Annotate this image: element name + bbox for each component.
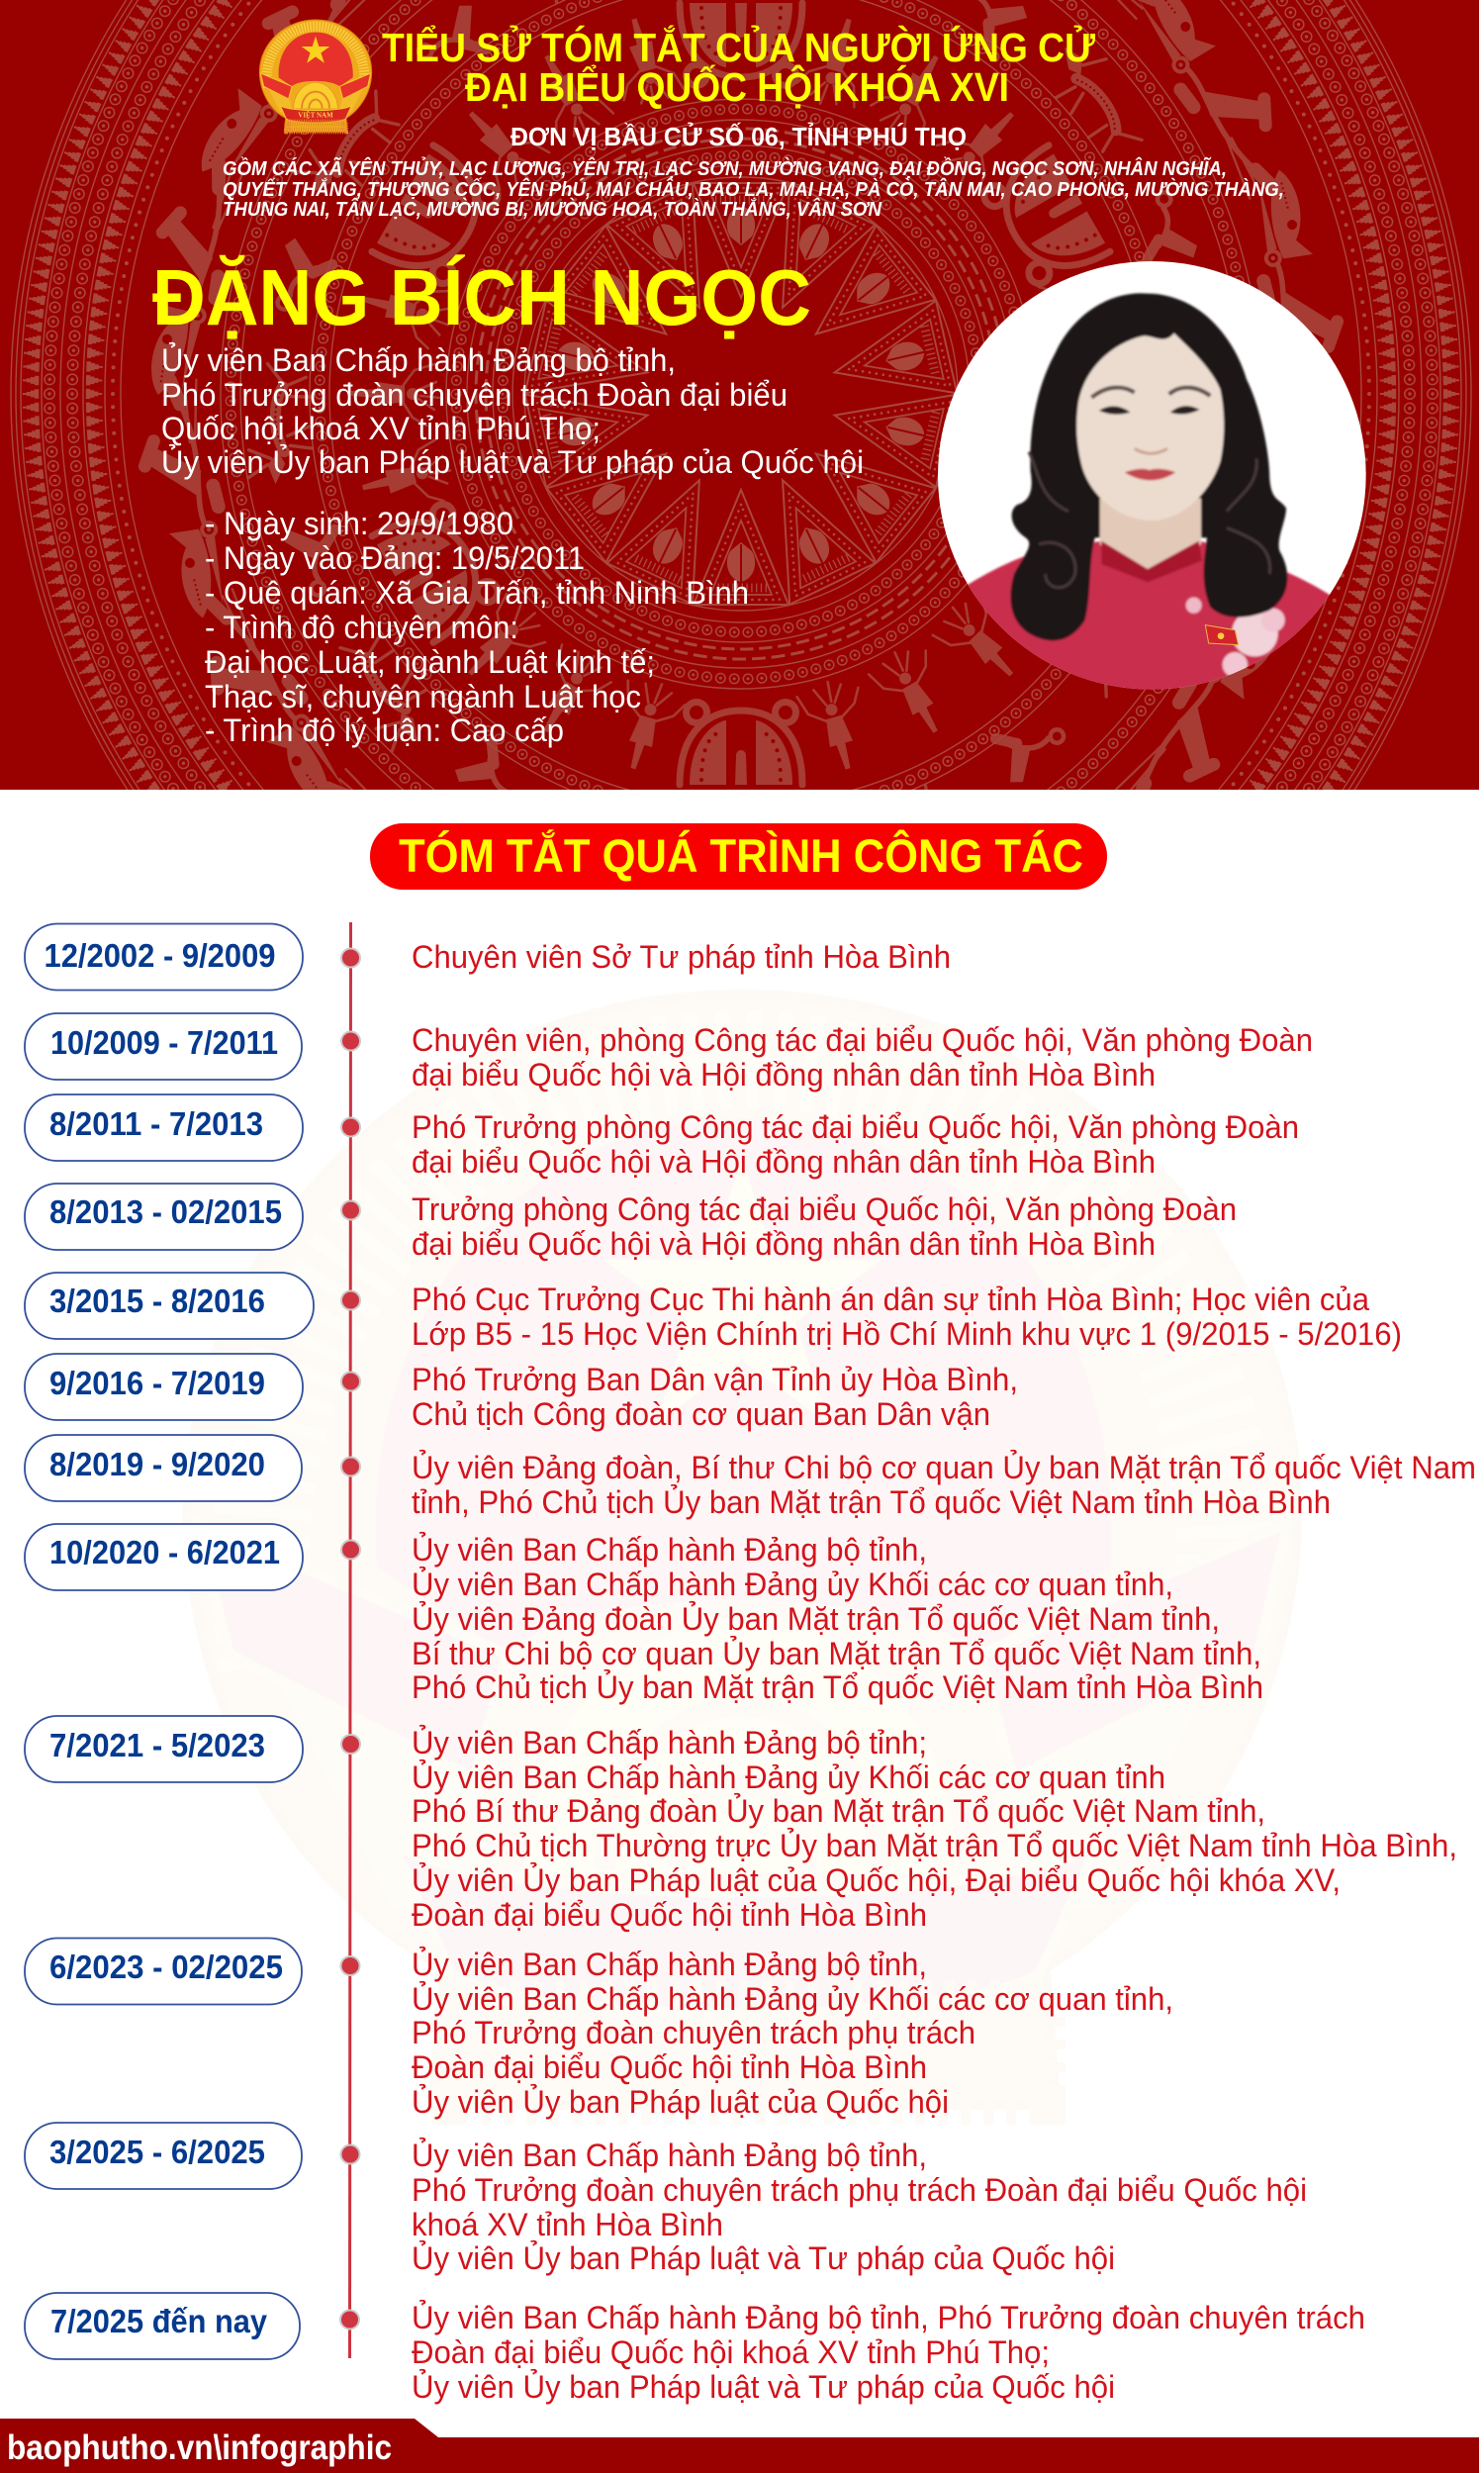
- entry: 7/2021 - 5/2023: 7/2021 - 5/2023: [49, 1727, 265, 1763]
- text block: list of communes: QUYẾT THẮNG, THƯỢNG CỐC, YÊN PhÚ, MAI CHÂU, BAO LA, MAI HẠ, PÀ CÒ, TÂN MAI, CAO PHONG, MƯỜNG THÀNG,: [223, 177, 1284, 201]
- text block: personal details: - Trình độ lý luận: Cao cấp: [205, 713, 564, 748]
- entry: 8/2011 - 7/2013: [25, 1094, 1299, 1180]
- entry: 6/2023 - 02/2025: Phó Trưởng đoàn chuyên trách phụ trách: [412, 2015, 975, 2050]
- entry: 7/2025 đến nay: [25, 2293, 1365, 2405]
- entry: 8/2013 - 02/2015: [25, 1184, 1237, 1262]
- entry: 10/2009 - 7/2011: Chuyên viên, phòng Công tác đại biểu Quốc hội, Văn phòng Đoàn: [412, 1022, 1313, 1058]
- entry: 3/2025 - 6/2025: Ủy viên Ủy ban Pháp luật và Tư pháp của Quốc hội: [412, 2240, 1115, 2276]
- text block: list of communes: [223, 156, 1284, 221]
- entry: 3/2025 - 6/2025: [25, 2123, 1307, 2276]
- entry: 6/2023 - 02/2025: Đoàn đại biểu Quốc hội tỉnh Hòa Bình: [412, 2049, 927, 2085]
- entry: 7/2021 - 5/2023: [25, 1716, 1457, 1933]
- text block: positions: Quốc hội khoá XV tỉnh Phú Thọ;: [161, 411, 601, 446]
- background watermark: national emblem: [187, 995, 1297, 2105]
- title: ĐẠI BIỂU QUỐC HỘI KHÓA XVI: [465, 63, 1009, 110]
- entry: 10/2020 - 6/2021: Ủy viên Ban Chấp hành Đảng ủy Khối các cơ quan tỉnh,: [412, 1567, 1173, 1602]
- panel: red header background with bronze drum pattern: [0, 0, 1479, 790]
- title: TIỂU SỬ TÓM TẮT CỦA NGƯỜI ỨNG CỬ: [382, 24, 1096, 70]
- entry: 6/2023 - 02/2025: [25, 1938, 1173, 2120]
- entry: 6/2023 - 02/2025: Ủy viên Ban Chấp hành Đảng bộ tỉnh,: [412, 1947, 927, 1982]
- entry: 7/2025 đến nay: Đoàn đại biểu Quốc hội khoá XV tỉnh Phú Thọ;: [412, 2334, 1050, 2370]
- text block: personal details: - Ngày sinh: 29/9/1980: [205, 506, 513, 541]
- entry: 7/2025 đến nay: Ủy viên Ban Chấp hành Đảng bộ tỉnh, Phó Trưởng đoàn chuyên trách: [412, 2300, 1365, 2335]
- entry: 7/2025 đến nay: Ủy viên Ủy ban Pháp luật và Tư pháp của Quốc hội: [412, 2369, 1115, 2405]
- entry: 8/2011 - 7/2013: đại biểu Quốc hội và Hội đồng nhân dân tỉnh Hòa Bình: [412, 1144, 1156, 1180]
- entry: 8/2013 - 02/2015: Trưởng phòng Công tác đại biểu Quốc hội, Văn phòng Đoàn: [412, 1191, 1237, 1227]
- entry: 8/2013 - 02/2015: 8/2013 - 02/2015: [49, 1193, 282, 1230]
- text block: personal details: [205, 506, 749, 748]
- entry: 12/2002 - 9/2009: [25, 924, 951, 990]
- entry: 7/2025 đến nay: 7/2025 đến nay: [50, 2303, 268, 2339]
- heading pill: work history: TÓM TẮT QUÁ TRÌNH CÔNG TÁC: [399, 829, 1083, 882]
- text block: personal details: Thạc sĩ, chuyên ngành Luật học: [205, 679, 641, 714]
- subtitle: constituency: ĐƠN VỊ BẦU CỬ SỐ 06, TỈNH PHÚ THỌ: [510, 121, 967, 151]
- text block: positions: [161, 342, 864, 480]
- entry: 7/2021 - 5/2023: Phó Chủ tịch Thường trực Ủy ban Mặt trận Tổ quốc Việt Nam tỉnh Hòa Bình,: [412, 1828, 1457, 1863]
- entry: 7/2021 - 5/2023: Ủy viên Ủy ban Pháp luật của Quốc hội, Đại biểu Quốc hội khóa XV,: [412, 1862, 1341, 1898]
- text block: positions: Ủy viên Ủy ban Pháp luật và Tư pháp của Quốc hội: [161, 444, 864, 480]
- entry: 8/2019 - 9/2020: [25, 1435, 1476, 1520]
- entry: 8/2019 - 9/2020: Ủy viên Đảng đoàn, Bí thư Chi bộ cơ quan Ủy ban Mặt trận Tổ quốc Việt Nam: [412, 1450, 1476, 1485]
- entry: 3/2015 - 8/2016: [25, 1273, 1402, 1352]
- text block: positions: Ủy viên Ban Chấp hành Đảng bộ tỉnh,: [161, 342, 676, 378]
- entry: 10/2020 - 6/2021: 10/2020 - 6/2021: [49, 1534, 280, 1570]
- entry: 3/2025 - 6/2025: khoá XV tỉnh Hòa Bình: [412, 2207, 723, 2242]
- entry: 8/2011 - 7/2013: Phó Trưởng phòng Công tác đại biểu Quốc hội, Văn phòng Đoàn: [412, 1109, 1299, 1145]
- footer bar: baophutho.vn\infographic: [7, 2428, 392, 2467]
- entry: 10/2020 - 6/2021: Phó Chủ tịch Ủy ban Mặt trận Tổ quốc Việt Nam tỉnh Hòa Bình: [412, 1669, 1263, 1705]
- entry: 6/2023 - 02/2025: Ủy viên Ban Chấp hành Đảng ủy Khối các cơ quan tỉnh,: [412, 1981, 1173, 2017]
- entry: 6/2023 - 02/2025: 6/2023 - 02/2025: [49, 1949, 283, 1985]
- entry: 9/2016 - 7/2019: 9/2016 - 7/2019: [49, 1365, 265, 1401]
- text block: personal details: - Ngày vào Đảng: 19/5/2011: [205, 540, 585, 576]
- entry: 7/2021 - 5/2023: Ủy viên Ban Chấp hành Đảng ủy Khối các cơ quan tỉnh: [412, 1760, 1165, 1795]
- footer bar: [0, 2419, 1479, 2473]
- entry: 3/2015 - 8/2016: 3/2015 - 8/2016: [49, 1283, 265, 1319]
- entry: 3/2025 - 6/2025: Phó Trưởng đoàn chuyên trách phụ trách Đoàn đại biểu Quốc hội: [412, 2172, 1307, 2208]
- timeline axis: [350, 922, 351, 2358]
- entry: 8/2013 - 02/2015: đại biểu Quốc hội và Hội đồng nhân dân tỉnh Hòa Bình: [412, 1226, 1156, 1262]
- entry: 3/2015 - 8/2016: Lớp B5 - 15 Học Viện Chính trị Hồ Chí Minh khu vực 1 (9/2015 - 5/2016): [412, 1316, 1402, 1352]
- entry: 8/2019 - 9/2020: 8/2019 - 9/2020: [49, 1446, 265, 1482]
- entry: 3/2025 - 6/2025: Ủy viên Ban Chấp hành Đảng bộ tỉnh,: [412, 2138, 927, 2173]
- icon: national emblem: VIỆT NAM: [298, 112, 333, 120]
- entry: 10/2009 - 7/2011: 10/2009 - 7/2011: [50, 1024, 278, 1061]
- entry: 12/2002 - 9/2009: Chuyên viên Sở Tư pháp tỉnh Hòa Bình: [412, 939, 951, 975]
- portrait photo in circle: [938, 261, 1366, 710]
- entry: 7/2021 - 5/2023: Đoàn đại biểu Quốc hội tỉnh Hòa Bình: [412, 1897, 927, 1933]
- heading: candidate name: ĐẶNG BÍCH NGỌC: [152, 253, 811, 341]
- text block: personal details: - Quê quán: Xã Gia Trấn, tỉnh Ninh Bình: [205, 575, 749, 611]
- entry: 3/2025 - 6/2025: 3/2025 - 6/2025: [49, 2134, 265, 2170]
- entry: 8/2019 - 9/2020: tỉnh, Phó Chủ tịch Ủy ban Mặt trận Tổ quốc Việt Nam tỉnh Hòa Bình: [412, 1484, 1331, 1520]
- entry: 7/2021 - 5/2023: Ủy viên Ban Chấp hành Đảng bộ tỉnh;: [412, 1725, 927, 1760]
- entry: 10/2020 - 6/2021: Ủy viên Ban Chấp hành Đảng bộ tỉnh,: [412, 1532, 927, 1568]
- entry: 7/2021 - 5/2023: Phó Bí thư Đảng đoàn Ủy ban Mặt trận Tổ quốc Việt Nam tỉnh,: [412, 1793, 1265, 1829]
- icon: national emblem: [259, 20, 372, 132]
- text block: list of communes: THUNG NAI, TÂN LẠC, MƯỜNG BI, MƯỜNG HOA, TOÀN THẮNG, VÂN SƠN: [223, 197, 882, 221]
- text block: positions: Phó Trưởng đoàn chuyên trách Đoàn đại biểu: [161, 377, 788, 413]
- entry: 9/2016 - 7/2019: Phó Trưởng Ban Dân vận Tỉnh ủy Hòa Bình,: [412, 1362, 1018, 1397]
- entry: 9/2016 - 7/2019: [25, 1354, 1018, 1432]
- entry: 9/2016 - 7/2019: Chủ tịch Công đoàn cơ quan Ban Dân vận: [412, 1396, 990, 1432]
- text block: list of communes: GỒM CÁC XÃ YÊN THỦY, LẠC LƯƠNG, YÊN TRỊ, LẠC SƠN, MƯỜNG VANG, ĐẠI ĐỒNG, NGỌC SƠN, NHÂN NGHĨA,: [223, 156, 1227, 180]
- entry: 6/2023 - 02/2025: Ủy viên Ủy ban Pháp luật của Quốc hội: [412, 2084, 949, 2120]
- text block: personal details: - Trình độ chuyên môn:: [205, 610, 518, 645]
- entry: 8/2011 - 7/2013: 8/2011 - 7/2013: [49, 1105, 263, 1142]
- title: [382, 24, 1096, 110]
- entry: 10/2009 - 7/2011: [25, 1013, 1313, 1093]
- entry: 10/2020 - 6/2021: Ủy viên Đảng đoàn Ủy ban Mặt trận Tổ quốc Việt Nam tỉnh,: [412, 1601, 1220, 1637]
- entry: 3/2015 - 8/2016: Phó Cục Trưởng Cục Thi hành án dân sự tỉnh Hòa Bình; Học viên của: [412, 1282, 1369, 1317]
- text block: personal details: Đại học Luật, ngành Luật kinh tế;: [205, 644, 655, 680]
- entry: 10/2009 - 7/2011: đại biểu Quốc hội và Hội đồng nhân dân tỉnh Hòa Bình: [412, 1057, 1156, 1093]
- entry: 12/2002 - 9/2009: 12/2002 - 9/2009: [44, 937, 275, 974]
- entry: 10/2020 - 6/2021: [25, 1524, 1263, 1705]
- entry: 10/2020 - 6/2021: Bí thư Chi bộ cơ quan Ủy ban Mặt trận Tổ quốc Việt Nam tỉnh,: [412, 1636, 1261, 1671]
